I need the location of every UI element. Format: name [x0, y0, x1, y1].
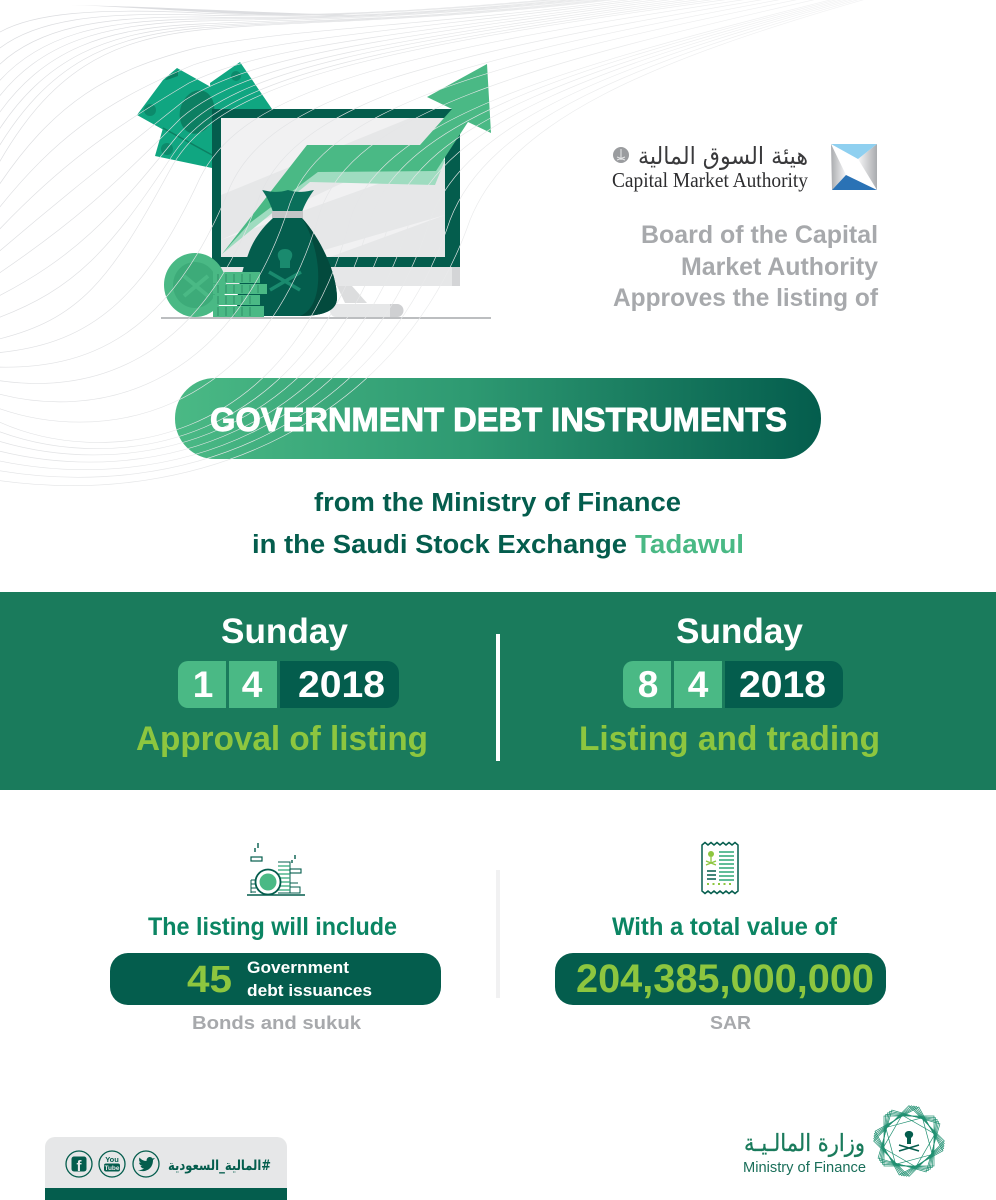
heading pill: government debt instruments	[175, 378, 821, 459]
panel: dates band	[0, 592, 996, 790]
count pill: 45	[187, 959, 232, 1001]
approval date: Sunday	[221, 612, 349, 651]
subtitle	[252, 489, 744, 559]
logo english name: Ministry of Finance	[743, 1160, 866, 1176]
heading text: GOVERNMENT DEBT INSTRUMENTS	[210, 401, 787, 438]
caption: SAR: SAR	[710, 1012, 751, 1033]
background wave lines	[0, 0, 880, 486]
label: the listing will include: The listing will include	[148, 913, 397, 941]
illustration: monitor with rising arrow, money bag, coins and banknotes	[137, 62, 491, 319]
panel: listing count	[110, 843, 441, 1033]
icon: youtube	[99, 1151, 125, 1177]
icon: twitter	[133, 1151, 159, 1177]
caption: bonds and sukuk: Bonds and sukuk	[192, 1012, 362, 1033]
icon: coins	[247, 843, 305, 895]
text block: board approval: Market Authority	[681, 253, 878, 281]
listing date	[579, 612, 880, 758]
icon: youtube: Tube	[104, 1165, 120, 1172]
approval date: 4	[242, 664, 263, 705]
icon: youtube: You	[105, 1155, 119, 1164]
logo arabic name: وزارة المالـيـة	[744, 1129, 865, 1157]
approval date: 2018	[298, 664, 385, 705]
listing date: Sunday	[676, 612, 804, 651]
approval date: 1	[193, 664, 213, 705]
banknotes	[137, 62, 272, 168]
logo arabic name: هيئة السوق المالية	[638, 142, 808, 170]
coin stack	[213, 272, 267, 317]
logo: Ministry of Finance	[743, 1106, 944, 1176]
listing date: 2018	[739, 664, 826, 705]
listing date: 4	[688, 664, 709, 705]
icon: facebook: f	[76, 1158, 82, 1175]
logo emblem	[874, 1106, 944, 1176]
hashtag: #المالية_السعودية	[168, 1158, 271, 1174]
logo english name: Capital Market Authority	[612, 168, 808, 192]
subtitle: in the Saudi Stock Exchange	[252, 531, 627, 559]
icon: receipt	[702, 842, 738, 894]
listing date: Listing and trading	[579, 720, 880, 758]
subtitle: from the Ministry of Finance	[314, 489, 681, 517]
listing date: 8	[638, 664, 658, 705]
logo seal	[613, 147, 629, 163]
rising arrow	[222, 64, 491, 254]
text block: board approval	[613, 221, 879, 312]
text block: board approval: Board of the Capital	[641, 221, 878, 249]
subtitle: Tadawul	[635, 531, 744, 559]
approval date: Approval of listing	[136, 720, 428, 758]
text block: board approval: Approves the listing of	[613, 284, 879, 312]
count pill: debt issuances	[247, 982, 372, 1000]
coin	[164, 253, 226, 317]
ground line	[161, 317, 491, 319]
footer: social panel	[45, 1137, 287, 1200]
label: with a total value of: With a total value of	[612, 913, 838, 941]
money bag	[237, 190, 337, 316]
count pill: Government	[247, 959, 350, 977]
divider	[496, 870, 500, 998]
logo: Capital Market Authority	[612, 142, 877, 192]
panel: total value	[555, 842, 886, 1033]
monitor	[212, 109, 460, 317]
approval date	[136, 612, 428, 758]
value pill: 204,385,000,000	[576, 957, 874, 1001]
logo mark	[831, 144, 877, 190]
icon: facebook	[66, 1151, 92, 1177]
count pill	[110, 953, 441, 1005]
